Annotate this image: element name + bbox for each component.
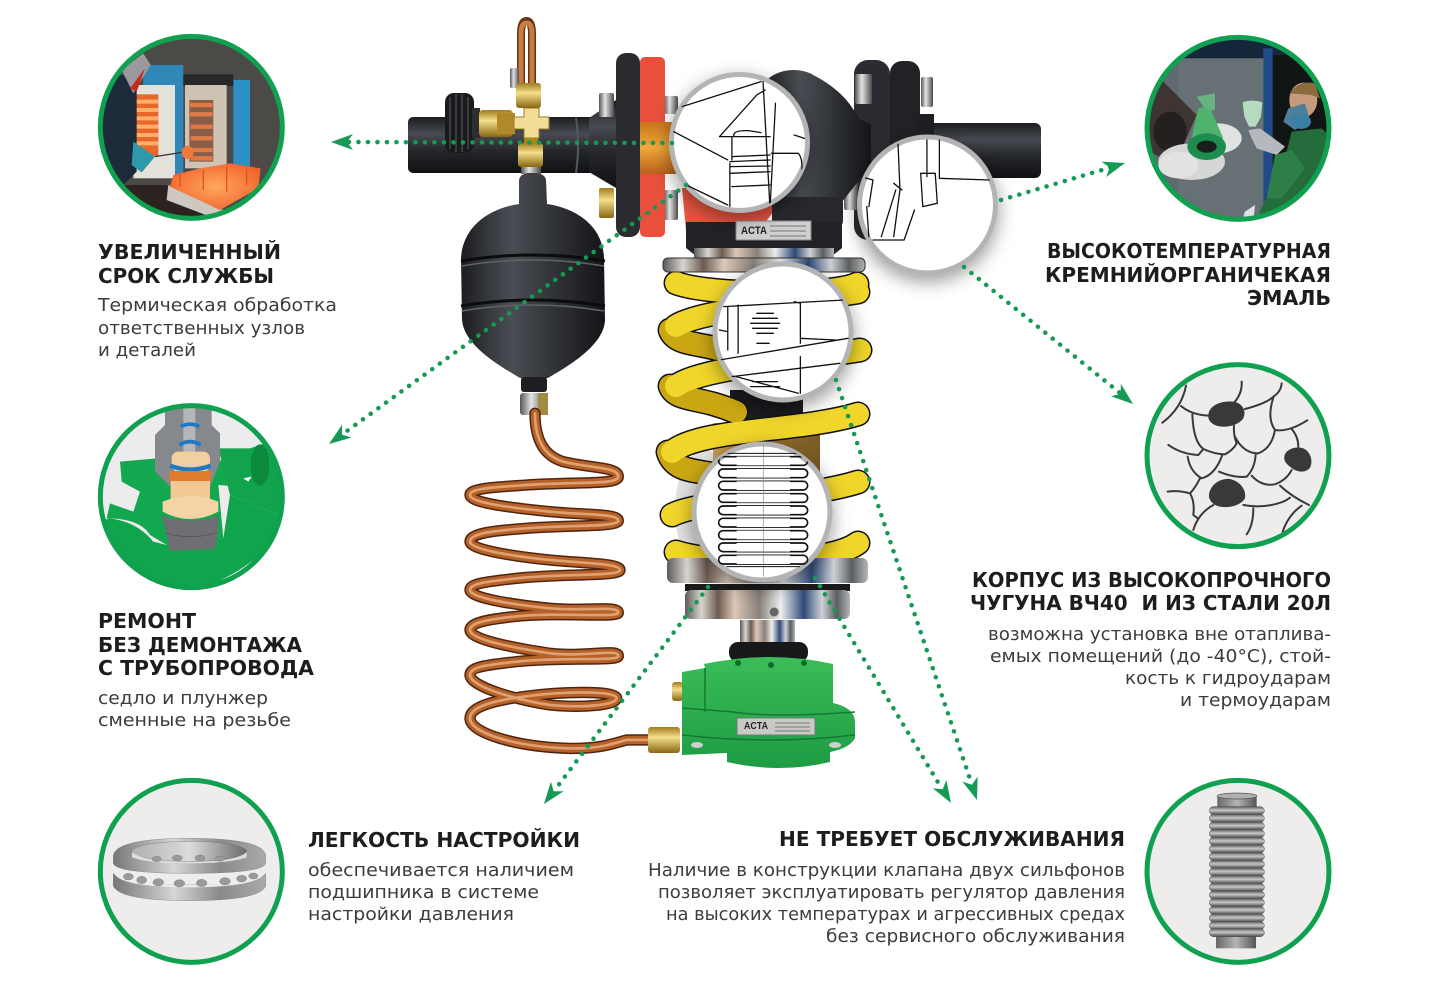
red-hot flange section [640, 57, 773, 237]
description [988, 624, 1331, 711]
graphite nodules and cracks [1162, 382, 1311, 534]
text block: high temperature enamel: ВЫСОКОТЕМПЕРАТУРНАЯ [1047, 239, 1331, 263]
heading: СРОК СЛУЖБЫ [98, 264, 274, 288]
description: Наличие в конструкции клапана двух сильфонов [648, 860, 1125, 881]
center column [675, 390, 820, 570]
photo circle: thrust bearing [100, 780, 282, 962]
brass fittings [479, 83, 549, 174]
heading: ЛЕГКОСТЬ НАСТРОЙКИ [308, 827, 580, 852]
text block: repair without dismantling [98, 609, 314, 731]
heading: ЧУГУНА ВЧ40 И ИЗ СТАЛИ 20Л [970, 591, 1331, 615]
bellows [1209, 793, 1264, 948]
description: настройки давления [308, 904, 514, 925]
heading: РЕМОНТ [98, 609, 196, 633]
heading [98, 609, 314, 680]
text block: long service life [97, 239, 337, 361]
magnifier lens 3: spring section [715, 264, 851, 400]
photo circle: heat treatment furnace [97, 32, 287, 222]
description: и деталей [98, 340, 196, 361]
dotted arrow: from upper bellows to no maintenance [836, 380, 978, 800]
description: позволяет эксплуатировать регулятор давления [658, 882, 1125, 903]
accumulator tank [461, 173, 605, 415]
description: обеспечивается наличием [308, 860, 574, 881]
heading: УВЕЛИЧЕННЫЙ [98, 239, 281, 264]
left flange with bolts [599, 53, 678, 237]
description: кость к гидроударам [1125, 668, 1331, 689]
dotted arrow: to easy adjustment [544, 587, 708, 804]
text block: no maintenance required [648, 827, 1125, 947]
dotted arrow: to heat treatment [331, 134, 672, 150]
description: без сервисного обслуживания [826, 926, 1125, 947]
description [97, 295, 337, 361]
top spring plate [663, 258, 865, 272]
text block: ductile iron body [970, 568, 1331, 711]
text block: high temperature enamel [1045, 239, 1331, 310]
description: подшипника в системе [308, 882, 539, 903]
yellow spring [668, 283, 860, 561]
description [98, 688, 291, 731]
description: возможна установка вне отаплива- [988, 624, 1331, 645]
photo circle: ductile iron microstructure [1147, 365, 1329, 547]
bearing [113, 838, 266, 901]
description: на высоких температурах и агрессивных средах [666, 904, 1125, 925]
dotted arrow: to cast iron structure [964, 267, 1133, 404]
heading: КОРПУС ИЗ ВЫСОКОПРОЧНОГО [972, 568, 1331, 592]
heading [98, 239, 281, 288]
heading [970, 568, 1331, 615]
description: седло и плунжер [98, 688, 268, 709]
text block: high temperature enamel: КРЕМНИЙОРГАНИЧЕКАЯ [1045, 262, 1331, 287]
heading: С ТРУБОПРОВОДА [98, 656, 314, 680]
magnifier lens 1: plunger [672, 74, 808, 210]
copper coil [470, 413, 653, 748]
left black pipe [408, 100, 616, 188]
photo circle: metal bellows [1147, 780, 1329, 962]
panel: pressure regulator assembly [408, 21, 1041, 768]
elbow body [762, 70, 871, 202]
magnifier lens 2: enamel coating [860, 137, 996, 273]
description: и термоударам [1180, 690, 1331, 711]
green actuator: ACTA [744, 721, 768, 732]
photo circle: replaceable seat and plunger [97, 402, 287, 592]
description [648, 860, 1125, 947]
green actuator [648, 657, 855, 768]
magnifier lens 4: bellows section [694, 443, 830, 580]
text block: easy adjustment [308, 827, 580, 925]
description: емых помещений (до -40°C), стой- [990, 646, 1331, 667]
photo circle: spray painting [1145, 35, 1336, 225]
description: ответственных узлов [98, 318, 305, 339]
description [308, 860, 574, 925]
collar with nameplate [686, 197, 843, 258]
copper U-tube on top [510, 21, 532, 88]
description: сменные на резьбе [98, 710, 291, 731]
dotted arrow: to seat and plunger repair [329, 185, 686, 444]
collar with nameplate: ACTA [741, 225, 767, 237]
heading: БЕЗ ДЕМОНТАЖА [98, 633, 302, 657]
dotted arrow: from lower bellows to no maintenance [815, 578, 951, 803]
bottom chrome plates [667, 558, 868, 662]
right flanges [844, 60, 1041, 240]
dotted arrow: to enamel photo [1001, 162, 1125, 200]
heading: НЕ ТРЕБУЕТ ОБСЛУЖИВАНИЯ [779, 827, 1125, 851]
text block: high temperature enamel: ЭМАЛЬ [1247, 286, 1331, 310]
description: Термическая обработка [97, 295, 337, 316]
handwheel [445, 93, 480, 153]
